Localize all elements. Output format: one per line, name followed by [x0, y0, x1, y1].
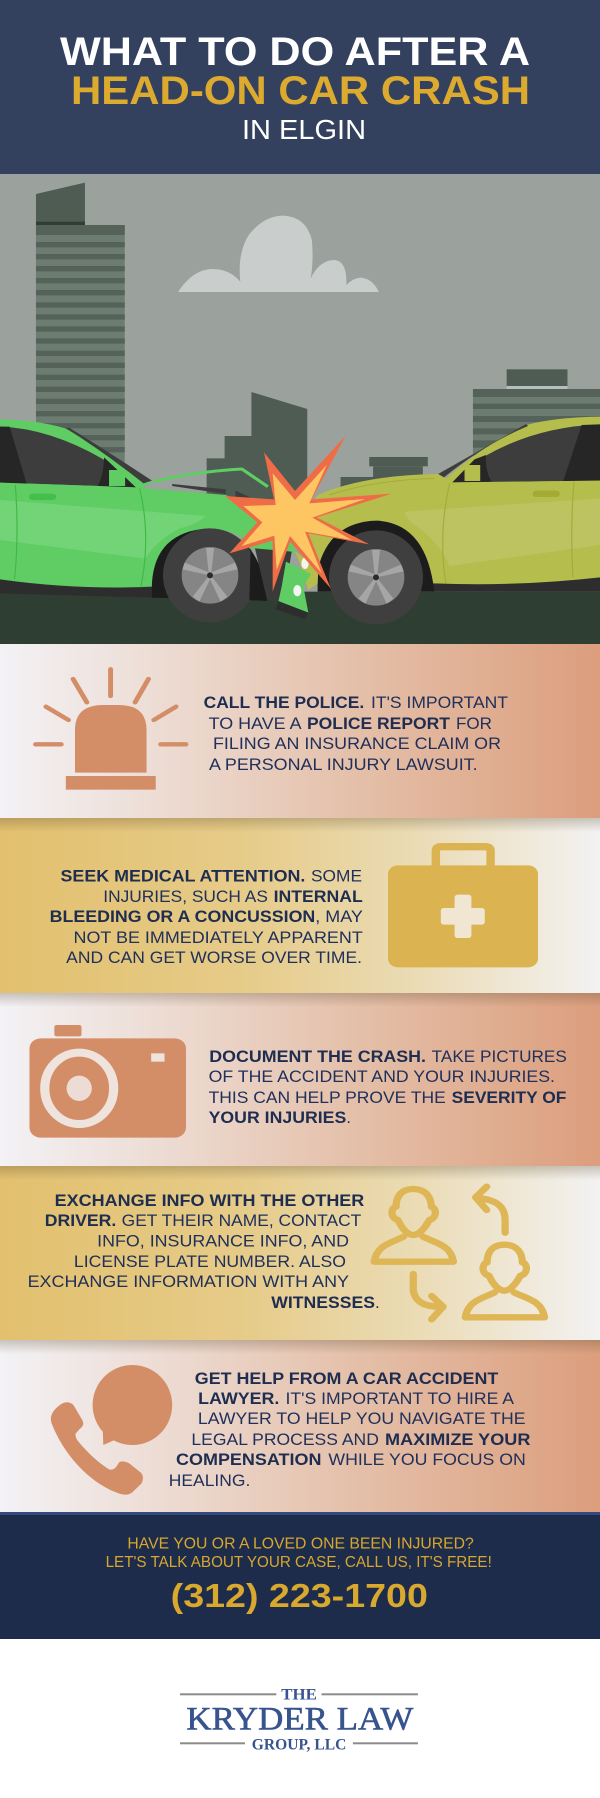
tall building	[36, 183, 125, 465]
sky	[0, 174, 600, 645]
centre buildings	[207, 392, 428, 507]
text: seek medical attention	[50, 867, 363, 967]
text: exchange info: WITNESSES	[271, 1293, 375, 1312]
panel: call the police	[0, 644, 600, 818]
text: exchange info: .	[375, 1293, 380, 1312]
text: call the police: FOR	[456, 714, 492, 733]
text: exchange info: EXCHANGE INFO WITH THE OTHER	[55, 1191, 364, 1210]
text: exchange info	[28, 1191, 380, 1312]
text: seek medical attention: SOME	[311, 867, 362, 886]
panel: get help from a lawyer	[0, 1340, 600, 1512]
text: get help from a lawyer: LEGAL PROCESS AND	[191, 1430, 379, 1449]
text: document the crash: OF THE ACCIDENT AND YOUR INJURIES.	[209, 1067, 555, 1086]
text: call the police	[204, 693, 508, 774]
text: get help from a lawyer: COMPENSATION	[176, 1450, 322, 1469]
subtitle: IN ELGIN	[242, 114, 366, 145]
icon: camera	[29, 1025, 186, 1138]
left wheel	[163, 528, 257, 622]
panel: document the crash	[0, 993, 600, 1166]
text: get help from a lawyer: IT'S IMPORTANT TO HIRE A	[286, 1389, 515, 1408]
text: get help from a lawyer: LAWYER TO HELP YOU NAVIGATE THE	[198, 1409, 526, 1428]
call to action panel	[0, 1512, 600, 1639]
phone number: (312) 223-1700	[171, 1577, 428, 1614]
icon: first aid kit	[388, 847, 538, 967]
text: document the crash	[209, 1047, 567, 1127]
logo: the kryder law group: GROUP, LLC	[252, 1736, 346, 1753]
text: document the crash: THIS CAN HELP PROVE THE	[209, 1088, 446, 1107]
text: get help from a lawyer: LAWYER.	[198, 1389, 279, 1408]
icon: two people exchanging	[374, 1187, 545, 1319]
panel: seek medical attention	[0, 818, 600, 993]
right building	[473, 369, 600, 456]
text: call the police: CALL THE POLICE.	[204, 693, 364, 712]
text: get help from a lawyer	[169, 1369, 530, 1490]
text: document the crash: .	[346, 1108, 351, 1127]
text: exchange info: INFO, INSURANCE INFO, AND	[97, 1231, 349, 1250]
illustration: head-on car crash	[0, 174, 600, 645]
text: get help from a lawyer: WHILE YOU FOCUS ON	[328, 1450, 526, 1469]
text: exchange info: LICENSE PLATE NUMBER. ALSO	[74, 1252, 346, 1271]
road	[0, 592, 600, 645]
text: seek medical attention: INJURIES, SUCH AS	[103, 887, 268, 906]
text: document the crash: TAKE PICTURES	[432, 1047, 567, 1066]
text: document the crash: SEVERITY OF	[452, 1088, 566, 1107]
green car	[0, 419, 297, 601]
text: call the police: IT'S IMPORTANT	[371, 693, 508, 712]
crumpled bumper	[249, 548, 318, 619]
yellow car	[302, 417, 600, 592]
text: seek medical attention: AND CAN GET WORSE OVER TIME.	[66, 948, 362, 967]
text: get help from a lawyer: GET HELP FROM A CAR ACCIDENT	[195, 1369, 499, 1388]
right wheel	[329, 530, 423, 624]
text: exchange info: DRIVER.	[45, 1211, 116, 1230]
text: seek medical attention: NOT BE IMMEDIATELY APPARENT	[74, 928, 363, 947]
cloud	[178, 216, 379, 292]
header panel	[0, 0, 600, 174]
text: seek medical attention: , MAY	[315, 907, 363, 926]
text: document the crash: YOUR INJURIES	[209, 1108, 346, 1127]
text: call the police: FILING AN INSURANCE CLAIM OR	[213, 734, 501, 753]
title line 1: WHAT TO DO AFTER A	[60, 30, 530, 74]
text: call the police: POLICE REPORT	[307, 714, 451, 733]
text: seek medical attention: BLEEDING OR A CONCUSSION	[50, 907, 315, 926]
text: exchange info: GET THEIR NAME, CONTACT	[122, 1211, 361, 1230]
call to action text line 1: HAVE YOU OR A LOVED ONE BEEN INJURED?	[127, 1535, 474, 1552]
logo: the kryder law group: KRYDER LAW	[186, 1701, 414, 1737]
text: get help from a lawyer: MAXIMIZE YOUR	[385, 1430, 530, 1449]
call to action text line 2: LET'S TALK ABOUT YOUR CASE, CALL US, IT'S FREE!	[106, 1554, 492, 1571]
title line 2: HEAD-ON CAR CRASH	[71, 69, 530, 113]
text: get help from a lawyer: HEALING.	[169, 1471, 250, 1490]
text: call the police: A PERSONAL INJURY LAWSUIT.	[209, 755, 478, 774]
panel: exchange info	[0, 1166, 600, 1340]
text: seek medical attention: SEEK MEDICAL ATTENTION.	[60, 867, 305, 886]
icon: phone and speech bubble	[51, 1365, 172, 1495]
text: document the crash: DOCUMENT THE CRASH.	[209, 1047, 426, 1066]
icon: siren	[36, 669, 186, 790]
logo: the kryder law group	[180, 1687, 418, 1753]
text: call the police: TO HAVE A	[209, 714, 302, 733]
explosion star	[225, 436, 392, 592]
text: seek medical attention: INTERNAL	[274, 887, 363, 906]
logo: the kryder law group: THE	[281, 1687, 317, 1704]
text: exchange info: EXCHANGE INFORMATION WITH ANY	[28, 1272, 349, 1291]
